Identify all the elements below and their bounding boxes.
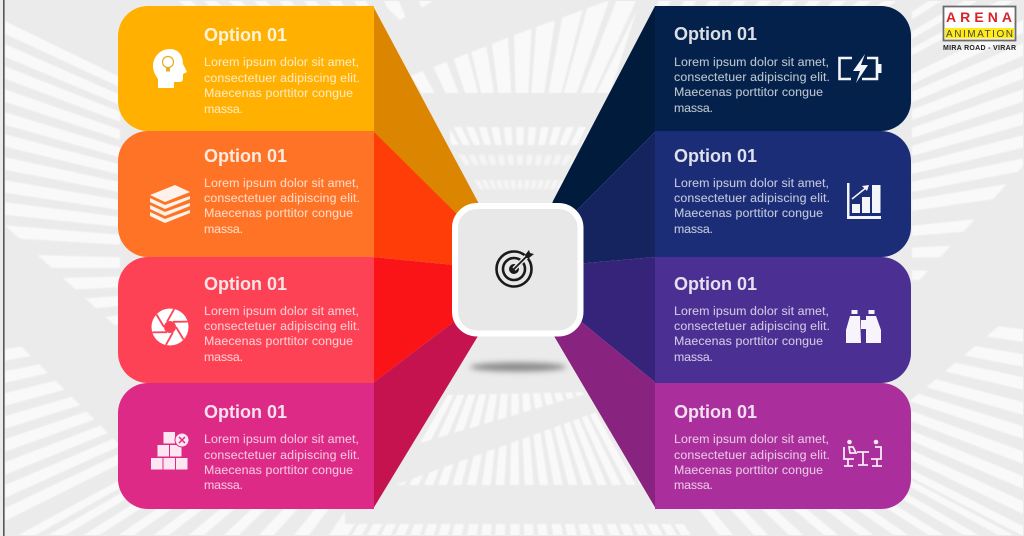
body text: Maecenas porttitor congue xyxy=(204,86,353,100)
heading: Option 01 xyxy=(674,24,757,44)
body text: Maecenas porttitor congue xyxy=(204,334,353,348)
body text: consectetuer adipiscing elit. xyxy=(674,319,830,333)
body text: consectetuer adipiscing elit. xyxy=(204,319,360,333)
body text xyxy=(674,304,830,364)
icon: head with light bulb xyxy=(153,49,187,88)
wedge: yellow connector xyxy=(373,6,490,250)
body text xyxy=(204,55,360,116)
logo: Arena Animation: MIRA ROAD - VIRAR xyxy=(943,45,1016,52)
body text: Maecenas porttitor congue xyxy=(204,206,353,220)
heading: Option 01 xyxy=(204,25,287,45)
logo: Arena Animation: ARENA xyxy=(946,9,1012,25)
wedge: blue connector xyxy=(540,131,656,267)
panel: navy option xyxy=(655,6,911,131)
body text: Lorem ipsum dolor sit amet, xyxy=(204,304,359,318)
heading: Option 01 xyxy=(674,146,757,166)
body text: massa. xyxy=(674,350,713,364)
body text xyxy=(674,55,830,115)
panel: magenta option xyxy=(118,383,374,509)
heading: Option 01 xyxy=(204,146,287,166)
body text: consectetuer adipiscing elit. xyxy=(204,191,360,205)
wedge: indigo connector xyxy=(540,257,656,383)
body text xyxy=(204,432,360,492)
body text xyxy=(204,176,360,236)
heading: Option 01 xyxy=(674,402,757,422)
body text: Lorem ipsum dolor sit amet, xyxy=(204,176,359,190)
center tile xyxy=(455,206,580,334)
body text: Lorem ipsum dolor sit amet, xyxy=(204,432,359,446)
icon: binoculars xyxy=(846,310,881,343)
body text: consectetuer adipiscing elit. xyxy=(204,71,360,85)
icon: stack of books xyxy=(150,185,190,223)
logo: Arena Animation: ANIMATION xyxy=(946,29,1013,40)
icon: target with arrow xyxy=(496,250,534,286)
center shadow xyxy=(470,362,566,372)
body text: Lorem ipsum dolor sit amet, xyxy=(674,304,829,318)
body text: massa. xyxy=(204,350,243,364)
panel: red option xyxy=(118,257,374,383)
body text: massa. xyxy=(674,101,713,115)
body text: Maecenas porttitor congue xyxy=(674,85,823,99)
body text: consectetuer adipiscing elit. xyxy=(674,448,830,462)
icon: two people meeting at a table xyxy=(844,440,882,466)
body text: massa. xyxy=(674,222,713,236)
panel: purple option xyxy=(655,383,911,509)
body text: massa. xyxy=(204,478,243,492)
body text: consectetuer adipiscing elit. xyxy=(204,448,360,462)
icon: stacked boxes with cross xyxy=(151,432,189,470)
panel: orange option xyxy=(118,131,374,257)
body text: consectetuer adipiscing elit. xyxy=(674,70,830,84)
body text: Lorem ipsum dolor sit amet, xyxy=(674,432,829,446)
panel: blue option xyxy=(655,131,911,257)
icon: charging battery xyxy=(840,54,882,83)
wedge: navy connector xyxy=(540,6,656,247)
body text xyxy=(674,432,830,492)
panel: yellow option xyxy=(118,6,374,131)
body text: Maecenas porttitor congue xyxy=(674,463,823,477)
body text: consectetuer adipiscing elit. xyxy=(674,191,830,205)
body text: Lorem ipsum dolor sit amet, xyxy=(674,176,829,190)
body text xyxy=(204,304,360,364)
body text: Maecenas porttitor congue xyxy=(204,463,353,477)
wedge: plum connector xyxy=(530,288,656,509)
wedge: orange connector xyxy=(373,131,480,268)
panel: indigo option xyxy=(655,257,911,383)
icon: camera aperture xyxy=(152,308,188,346)
wedge: crimson connector xyxy=(373,302,500,509)
body text: massa. xyxy=(204,102,243,116)
heading: Option 01 xyxy=(204,274,287,294)
body text: massa. xyxy=(674,478,713,492)
body text: massa. xyxy=(204,222,243,236)
body text: Maecenas porttitor congue xyxy=(674,334,823,348)
icon: bar chart with arrow xyxy=(847,183,881,219)
wedge: red connector xyxy=(373,257,480,383)
heading: Option 01 xyxy=(204,402,287,422)
body text: Lorem ipsum dolor sit amet, xyxy=(674,55,829,69)
left page border xyxy=(3,0,5,536)
body text: Lorem ipsum dolor sit amet, xyxy=(204,55,359,69)
heading: Option 01 xyxy=(674,274,757,294)
logo: Arena Animation xyxy=(943,6,1016,52)
body text xyxy=(674,176,830,236)
body text: Maecenas porttitor congue xyxy=(674,206,823,220)
